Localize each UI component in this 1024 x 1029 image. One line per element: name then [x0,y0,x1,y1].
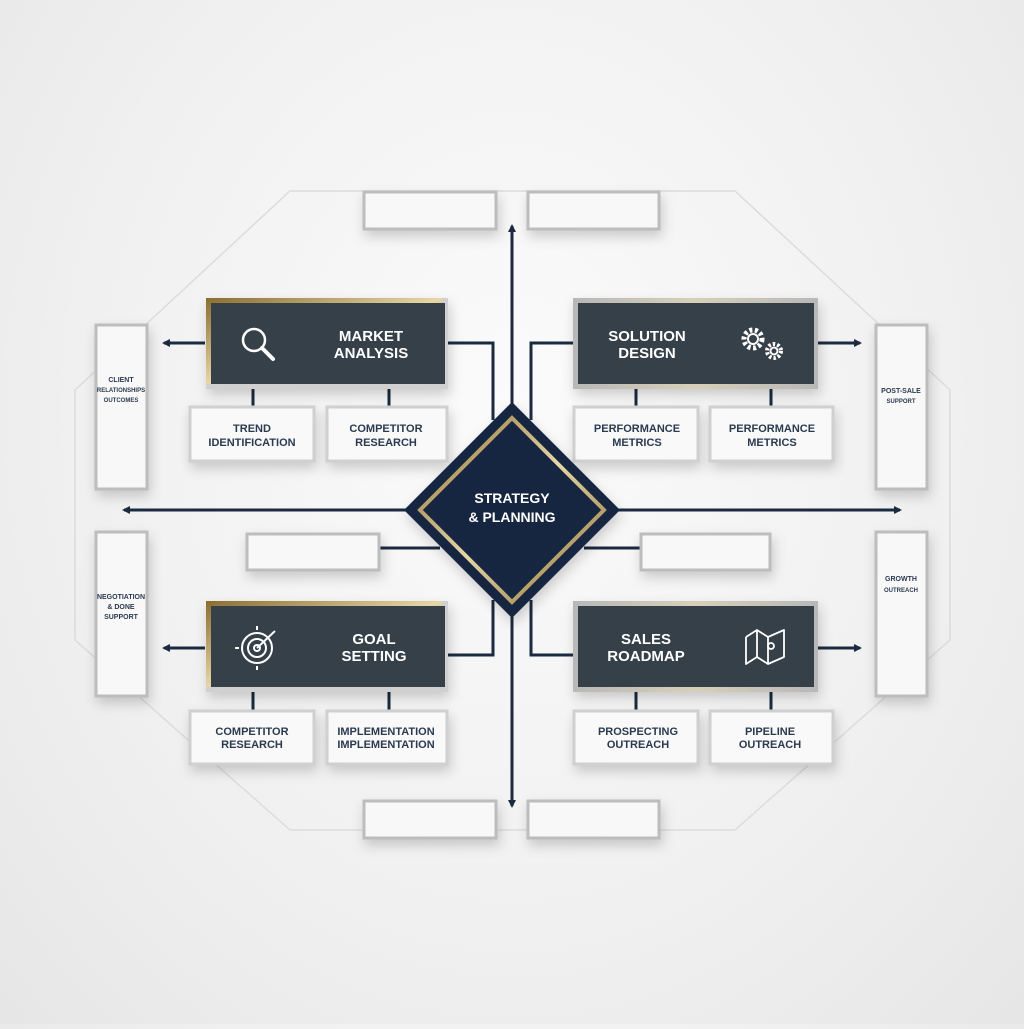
center diamond: strategy & planning: STRATEGY [474,490,550,506]
panel: goal setting: GOAL [352,631,396,648]
sub: implementation: IMPLEMENTATION [337,726,435,738]
panel: solution design: DESIGN [618,345,676,362]
panel: goal setting [206,601,448,692]
sub: performance metrics 1: PERFORMANCE [594,423,680,435]
sub: trend identification [190,407,314,461]
icon: map [746,630,784,664]
panel: market analysis: ANALYSIS [334,345,408,362]
side box: client relationships [96,325,147,489]
sub: prospecting outreach: OUTREACH [607,739,669,751]
sub: competitor research 2: RESEARCH [221,739,283,751]
panel: solution design: SOLUTION [608,328,686,345]
panel: goal setting: SETTING [341,648,407,665]
sub: prospecting outreach [574,711,698,764]
sub: performance metrics 2 [710,407,833,461]
side box: negotiation support: NEGOTIATION [97,594,145,601]
panel: sales roadmap: ROADMAP [607,648,685,665]
side box: negotiation support: SUPPORT [104,614,139,621]
side box: growth outreach: GROWTH [885,576,917,583]
icon: gears [744,330,781,358]
main axes [124,226,900,806]
side box: growth outreach: OUTREACH [884,588,918,594]
side box: growth outreach [876,532,927,696]
side box: client relationships: CLIENT [108,377,134,384]
side box: negotiation support [96,532,147,696]
panel: solution design [573,298,818,389]
sub: trend identification: TREND [233,423,271,435]
center diamond: strategy & planning [404,402,620,618]
sub: performance metrics 2: METRICS [747,437,797,449]
panel: sales roadmap: SALES [621,631,671,648]
sub: pipeline outreach: OUTREACH [739,739,801,751]
sub: competitor research: RESEARCH [355,437,417,449]
sub: prospecting outreach: PROSPECTING [598,726,678,738]
side box: client relationships: OUTCOMES [104,398,138,404]
sub: performance metrics 1: METRICS [612,437,662,449]
panel: market analysis [206,298,448,389]
panel: market analysis: MARKET [339,328,403,345]
sub boxes [190,407,833,764]
center diamond: strategy & planning: & PLANNING [468,509,556,525]
sub: pipeline outreach [710,711,833,764]
sub: implementation [327,711,447,764]
background octagon outline [75,191,950,830]
panel: sales roadmap [573,601,818,692]
icon: target [235,626,275,670]
side box: post-sale support: SUPPORT [886,399,916,405]
side box: post-sale support [876,325,927,489]
sub: competitor research 2 [190,711,314,764]
sub: performance metrics 1 [574,407,698,461]
side box: post-sale support: POST-SALE [881,388,921,395]
side box: negotiation support: & DONE [107,604,135,611]
icon: magnifier [243,329,273,359]
sub: competitor research 2: COMPETITOR [215,726,289,738]
sub: performance metrics 2: PERFORMANCE [729,423,815,435]
sub: implementation: IMPLEMENTATION [337,739,435,751]
sub: trend identification: IDENTIFICATION [208,437,296,449]
sub: pipeline outreach: PIPELINE [745,726,795,738]
sub: competitor research [327,407,447,461]
sub: competitor research: COMPETITOR [349,423,423,435]
empty boxes [247,192,770,838]
side box: client relationships: RELATIONSHIPS [97,388,145,394]
